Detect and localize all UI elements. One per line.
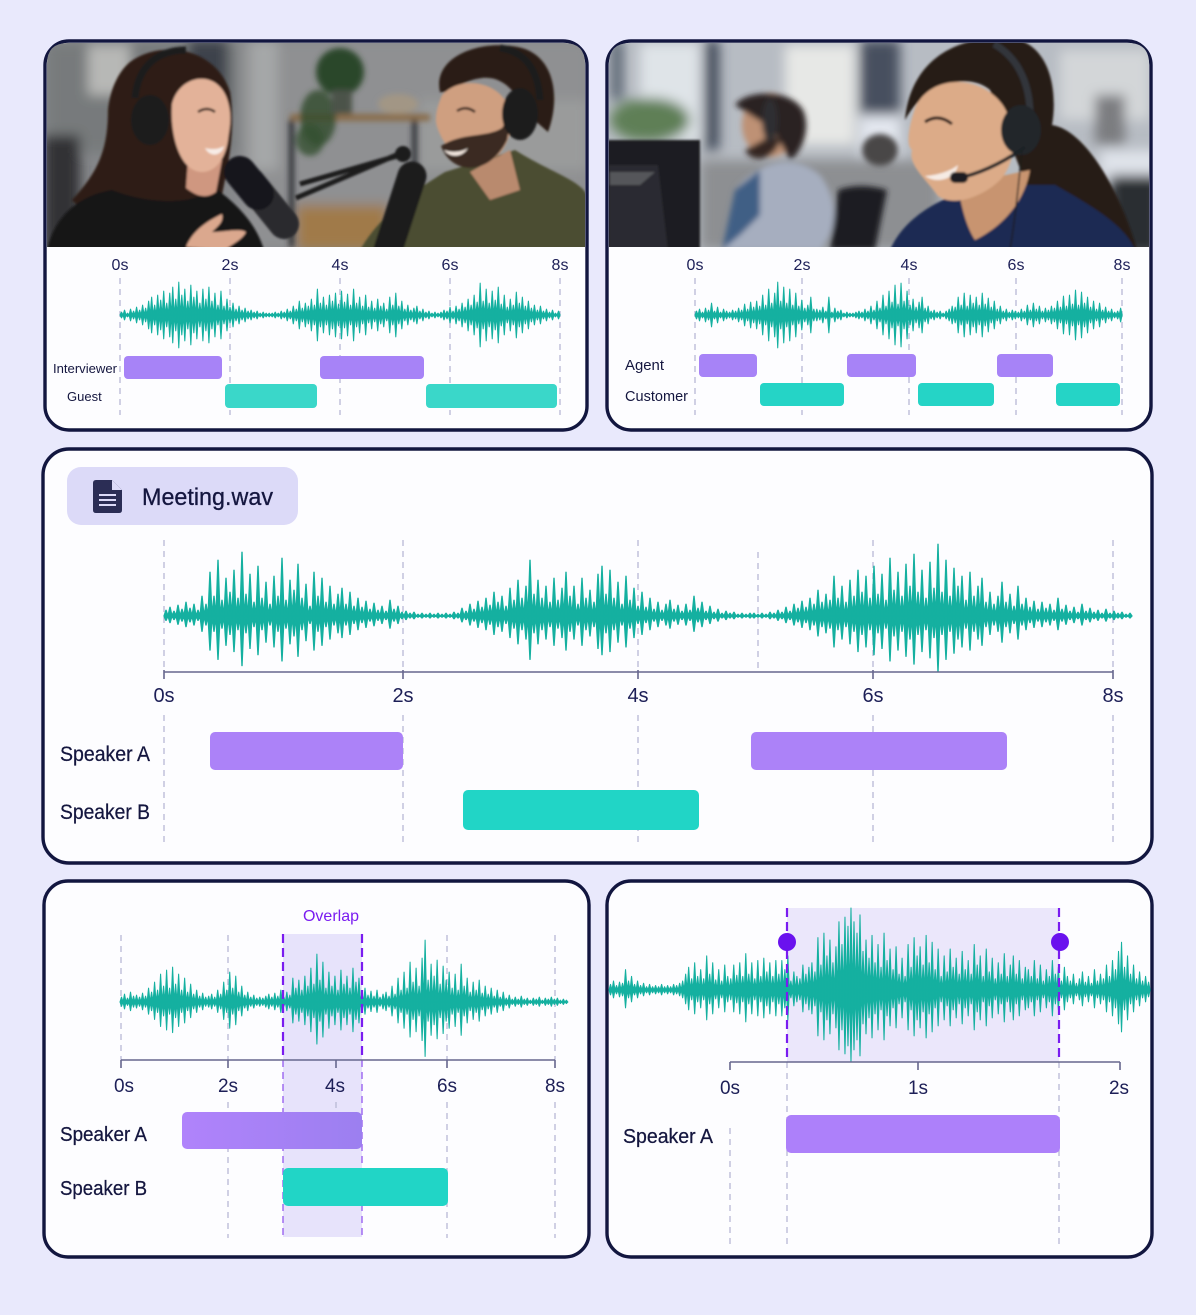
time labels: 6s (862, 685, 884, 707)
speaker labels (625, 357, 688, 405)
time gridlines (120, 278, 560, 415)
time labels: 0s (153, 685, 175, 707)
file name: Meeting.wav (142, 484, 273, 511)
speaker labels: Speaker A (60, 1124, 148, 1146)
photo: call center agent with headset (605, 38, 1160, 255)
time labels: 2s (1109, 1078, 1129, 1099)
time axis (121, 1060, 555, 1068)
speaker labels: Guest (67, 389, 102, 404)
speaker labels (60, 1124, 148, 1200)
waveform (120, 282, 560, 348)
waveform (695, 282, 1122, 348)
time labels: 2s (218, 1076, 238, 1097)
speaker labels: Speaker B (60, 801, 150, 824)
panel: podcast interview (44, 40, 590, 430)
speaker labels: Speaker A (60, 743, 150, 766)
speaker bars: speaker A (210, 732, 1007, 770)
speaker labels: Customer (625, 388, 688, 405)
time labels: 4s (332, 257, 348, 274)
time labels: 0s (114, 1076, 134, 1097)
time labels: 6s (437, 1076, 457, 1097)
speaker bars: customer (760, 383, 1120, 406)
icon: document (93, 480, 122, 513)
time labels (114, 1076, 565, 1097)
speaker labels (60, 743, 150, 824)
time labels: 0s (112, 257, 128, 274)
speaker labels (53, 361, 118, 404)
time axis (164, 670, 1113, 679)
overlap region (283, 934, 362, 1237)
panel: overlapping speech (44, 881, 589, 1257)
time labels: 4s (901, 257, 917, 274)
file badge (67, 467, 298, 525)
time labels: 6s (1008, 257, 1024, 274)
speaker bars: interviewer (124, 356, 424, 379)
time gridlines (730, 1062, 1059, 1245)
time labels: 8s (552, 257, 568, 274)
time labels (112, 257, 568, 274)
time axis (730, 1062, 1120, 1070)
waveform (164, 544, 1132, 672)
waveform (120, 940, 568, 1057)
time labels (153, 685, 1124, 707)
time labels: 1s (908, 1078, 928, 1099)
time labels: 6s (442, 257, 458, 274)
time labels: 0s (687, 257, 703, 274)
time labels: 8s (1102, 685, 1124, 707)
speaker label: Speaker A (623, 1126, 714, 1148)
overlap label: Overlap (303, 908, 359, 925)
time gridlines (695, 278, 1122, 415)
waveform (609, 908, 1150, 1062)
photo: two podcast speakers with headphones and microphones (44, 40, 590, 250)
panel: call center (605, 38, 1160, 430)
segment boundaries (787, 908, 1059, 1062)
overlap boundaries (283, 934, 362, 1237)
speaker labels: Agent (625, 357, 665, 374)
time labels: 4s (627, 685, 649, 707)
speaker bar: speaker B (463, 790, 699, 830)
time labels: 0s (720, 1078, 740, 1099)
segment markers (778, 933, 1069, 951)
panel: meeting recording (43, 449, 1152, 863)
time gridlines (121, 935, 555, 1238)
time labels: 2s (392, 685, 414, 707)
speaker labels: Speaker B (60, 1178, 147, 1200)
speaker labels: Interviewer (53, 361, 118, 376)
time labels: 2s (794, 257, 810, 274)
time labels (720, 1078, 1129, 1099)
speaker bar: speaker A (182, 1112, 362, 1149)
time labels (687, 257, 1130, 274)
speaker bar: speaker A (786, 1115, 1060, 1153)
time labels: 8s (545, 1076, 565, 1097)
time labels: 4s (325, 1076, 345, 1097)
speaker bar: speaker B (283, 1168, 448, 1206)
time labels: 2s (222, 257, 238, 274)
speaker bars: guest (225, 384, 557, 408)
speaker bars: agent (699, 354, 1053, 377)
time labels: 8s (1114, 257, 1130, 274)
time gridlines (164, 540, 1113, 846)
segment highlight (787, 908, 1059, 1062)
panel: single speaker segment (607, 881, 1152, 1257)
